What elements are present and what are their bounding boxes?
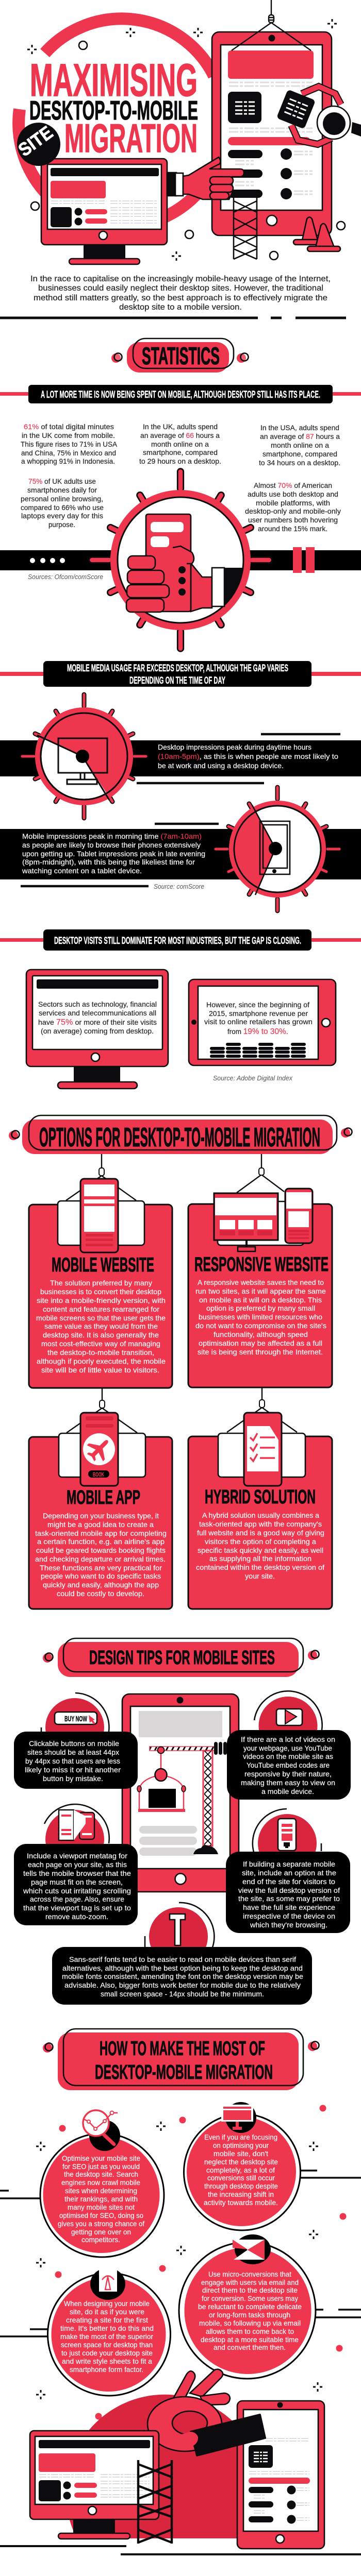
circle tip: SEO: sites when determining bbox=[65, 2187, 137, 2195]
panel: hybrid solution: your site. bbox=[245, 1572, 275, 1580]
stat: UK adults hours: In the UK, adults spend bbox=[143, 422, 218, 431]
panel: mobile app: task-oriented mobile app for completing bbox=[35, 1529, 167, 1537]
monitor with sectors stat: services and telecommunications all bbox=[39, 1009, 156, 1017]
stat: UK adults hours: month online on a bbox=[151, 440, 209, 448]
stat: American adults bbox=[245, 481, 341, 533]
panel: responsive website: functionality, although speed bbox=[214, 1330, 308, 1338]
circle tip: SEO: the desktop site. Search bbox=[64, 2170, 138, 2178]
band: mobile impressions: Mobile impressions peak in morning time (7am-10am) bbox=[22, 832, 202, 840]
tip: separate mobile site: If building a separate mobile bbox=[243, 1860, 335, 1868]
closing illustration bbox=[30, 2369, 324, 2549]
band: desktop impressions: (10am-5pm) , as this is when people are most likely to bbox=[158, 752, 338, 760]
panel: mobile app: people who want to do specific tasks bbox=[41, 1572, 161, 1580]
circle tip: desktop site: activity towards mobile. bbox=[204, 2198, 278, 2207]
ground lines bbox=[0, 2546, 361, 2554]
intro text bbox=[30, 275, 331, 312]
icon: typography T bbox=[145, 1903, 214, 1966]
stat: UK digital minutes: in the UK come from mobile. bbox=[22, 431, 115, 439]
icon: phone with desktop link bbox=[253, 1809, 321, 1873]
panel: hybrid solution: A hybrid solution usually combines a bbox=[202, 1511, 319, 1519]
circle tip: micro-conversions: or long-form tasks through bbox=[209, 2311, 290, 2319]
stat: UK adults smartphones bbox=[21, 477, 104, 529]
tip: viewport metatag: that the viewport tag is set up to bbox=[23, 1904, 131, 1912]
stat: UK adults smartphones: personal online browsing, bbox=[21, 495, 103, 503]
stat: American adults: mobile platforms, with bbox=[256, 499, 330, 507]
panel: responsive website: run two sites, as it will appear the same bbox=[195, 1287, 326, 1295]
stat: UK digital minutes bbox=[21, 422, 118, 465]
tip: separate mobile site: irrespective of the device on bbox=[243, 1912, 335, 1920]
stat: American adults: Almost 70% of American bbox=[254, 481, 332, 489]
panel: hybrid solution: task-oriented app with the company's bbox=[199, 1520, 322, 1528]
tip: viewport metatag: which cuts out irritating scrolling bbox=[23, 1887, 131, 1895]
circle tip: desktop site: Even if you are focusing bbox=[204, 2133, 277, 2141]
circle tip: SEO: for SEO just as you would bbox=[62, 2162, 140, 2171]
band: mobile impressions bbox=[0, 824, 361, 886]
panel: responsive website: do not want to compromise on the site's bbox=[195, 1321, 326, 1330]
panel: mobile website: The solution preferred by many bbox=[50, 1279, 152, 1287]
circle tip: desktop site: the increasing shift in bbox=[208, 2190, 274, 2198]
band: mobile impressions: watching content on a tablet device. bbox=[22, 867, 142, 875]
band: mobile impressions: (8pm-midnight), with this being the likeliest time for bbox=[22, 858, 195, 866]
tablet bbox=[237, 2401, 324, 2549]
monitor with sectors stat: Sectors such as technology, financial bbox=[38, 1000, 157, 1008]
panel: mobile website: the desktop-to-mobile transition, bbox=[47, 1348, 154, 1357]
large phone bbox=[212, 0, 332, 235]
panel: mobile website: MOBILE WEBSITE bbox=[52, 1254, 154, 1276]
circle tip: SEO: optimised for SEO, doing so bbox=[59, 2211, 143, 2219]
tip: youtube videos: making them easy to view on bbox=[241, 1778, 335, 1787]
heading: how to make the most bbox=[43, 2029, 319, 2090]
black card held in hand bbox=[191, 2415, 265, 2455]
panel: hybrid solution: as supplying all the information bbox=[209, 1554, 311, 1563]
traffic cones bbox=[293, 217, 340, 251]
panel: responsive website: site is being sent through the Internet. bbox=[198, 1348, 323, 1356]
tip: viewport metatag: Include a viewport metatag for bbox=[27, 1852, 127, 1860]
pointing hand bbox=[167, 157, 244, 199]
circle tip: micro-conversions: engage with users via email and bbox=[201, 2278, 299, 2286]
stat: USA adults hours: month online on a bbox=[271, 441, 329, 449]
tip: viewport metatag bbox=[14, 1844, 138, 1925]
phone with crane illustration bbox=[122, 1694, 239, 1892]
tablet with revenue stat bbox=[189, 979, 336, 1065]
panel: hybrid solution: contained within the desktop version of bbox=[196, 1563, 324, 1571]
icon: buy now button bbox=[41, 1693, 109, 1757]
band: mobile impressions: as people are likely to browse their phones extensively bbox=[22, 841, 201, 849]
stat: UK adults smartphones: smartphones daily for bbox=[27, 486, 97, 494]
crane hook rope bbox=[232, 0, 311, 50]
circle tip: desktop site: through desktop despite bbox=[204, 2182, 278, 2190]
band: desktop impressions: Desktop impressions peak during daytime hours bbox=[158, 743, 311, 751]
sources note: Sources: Ofcom/comScore bbox=[28, 573, 103, 581]
circle tip: SEO: Optimise your mobile site bbox=[62, 2154, 140, 2162]
stat: UK digital minutes: This figure rises to 71% in USA bbox=[21, 440, 118, 448]
tip: clickable buttons: Clickable buttons on mobile bbox=[29, 1739, 119, 1748]
tip: viewport metatag: each page on your site, as this bbox=[28, 1860, 127, 1869]
tip: viewport metatag: across the page. Also, ensure bbox=[30, 1895, 124, 1903]
heading: options bbox=[9, 1115, 352, 1154]
panel: hybrid solution: specific task quickly and easily, as well bbox=[198, 1546, 323, 1554]
stat: UK adults hours: to 29 hours on a desktop. bbox=[139, 457, 221, 465]
black band with loading dots bbox=[0, 547, 361, 573]
panel: responsive website: option is preferred by many small bbox=[206, 1304, 315, 1312]
stat: USA adults hours bbox=[259, 423, 340, 467]
circle tip: micro-conversions: allows them to come back to bbox=[206, 2327, 294, 2335]
circle tip: SEO: many mobile sites not bbox=[68, 2203, 135, 2211]
panel: mobile website bbox=[29, 1154, 172, 1388]
subheading: media usage: DEPENDING ON THE TIME OF DAY bbox=[129, 675, 225, 686]
subheading: desktop visits bbox=[0, 929, 361, 951]
panel: responsive website: optimisation may be affected as a full bbox=[199, 1339, 322, 1347]
site badge: SITE bbox=[14, 122, 57, 160]
circle tip: designing mobile site: and write style sheets to fit a bbox=[62, 2357, 152, 2365]
panel: mobile app: might be a good idea to create a bbox=[47, 1520, 154, 1529]
tablet with revenue stat: visit to online retailers has grown bbox=[204, 1018, 313, 1026]
source note: Source: comScore bbox=[154, 883, 204, 890]
backdrop shape bbox=[66, 2395, 264, 2538]
stat: UK adults smartphones: compared to 66% who use bbox=[21, 503, 104, 512]
circle tip: SEO: engines now crawl mobile bbox=[61, 2178, 140, 2187]
circle tip: desktop site: conversions still occur bbox=[207, 2174, 275, 2182]
title: MIGRATION bbox=[64, 115, 198, 161]
title: MAXIMISING bbox=[30, 54, 198, 106]
circle tip: designing mobile site: site, do it as if you were bbox=[70, 2308, 144, 2316]
circle tip: micro-conversions bbox=[179, 2234, 316, 2379]
panel: mobile website: site into a mobile-friendly version, with bbox=[37, 1296, 166, 1304]
tip: separate mobile site: the site, as some may prefer to bbox=[238, 1894, 340, 1903]
panel: mobile app: could be geared towards booking flights bbox=[36, 1546, 166, 1554]
scaffold tower bbox=[138, 2460, 172, 2544]
circle tip: desktop site: completely, as a lot of bbox=[206, 2166, 275, 2174]
stat: UK adults hours: smartphone, compared bbox=[143, 448, 218, 456]
tip: separate mobile site: view the full desktop version of bbox=[238, 1886, 340, 1894]
tip: viewport metatag: tells the mobile browser that the bbox=[23, 1869, 131, 1877]
panel: mobile website: content and features rearranged for bbox=[43, 1305, 159, 1313]
tip: viewport metatag: page must fit on the screen, bbox=[31, 1878, 123, 1886]
panel: mobile app: Depending on your business type, it bbox=[43, 1512, 159, 1520]
target wheel with hand holding phone bbox=[92, 471, 269, 649]
circle tip: designing mobile site: time. It's better to do this and bbox=[60, 2324, 154, 2332]
circle tip: desktop site: mobile site, don't bbox=[214, 2149, 268, 2158]
circle tip: designing mobile site: When designing your mobile bbox=[64, 2299, 150, 2308]
stat: UK adults smartphones: purpose. bbox=[48, 520, 75, 529]
stat: UK digital minutes: and China, 75% in Mexico and bbox=[21, 449, 116, 457]
icon: video play bbox=[254, 1691, 322, 1755]
panel: mobile app: a certain function, e.g. an airline's app bbox=[37, 1537, 165, 1546]
tip: viewport metatag: remove auto-zoom. bbox=[45, 1912, 108, 1921]
stat: UK adults smartphones: laptops every day for this bbox=[21, 512, 103, 520]
tip: separate mobile site: have the full site experience bbox=[243, 1903, 335, 1911]
stat: American adults: around the 15% mark. bbox=[258, 524, 327, 533]
band: mobile impressions: upon getting up. Tablet impressions peak in late evening bbox=[22, 850, 205, 858]
tip: separate mobile site: end of the site for visitors to bbox=[242, 1877, 335, 1886]
tablet with revenue stat: However, since the beginning of bbox=[206, 1001, 309, 1009]
tip: separate mobile site: site, include an option at the bbox=[242, 1869, 336, 1877]
connector lines bbox=[0, 2171, 361, 2336]
monitor with sectors stat bbox=[26, 970, 168, 1089]
tip: separate mobile site bbox=[226, 1852, 350, 1933]
divider bbox=[0, 316, 346, 319]
circle tip: designing mobile site: screen space for desktop than bbox=[61, 2341, 153, 2349]
icon: desktop monitor bbox=[221, 2102, 256, 2133]
circle tip: micro-conversions: desktop at a more suitable time bbox=[201, 2335, 299, 2344]
stat: UK digital minutes: 61% of total digital minutes bbox=[24, 422, 114, 431]
panel: mobile website: most cost-effective way of managing bbox=[41, 1340, 160, 1348]
circle tip: designing mobile site: creating a site for the first bbox=[66, 2316, 148, 2324]
icon: mobile layout bbox=[58, 1179, 144, 1252]
tip: clickable buttons: button by mistake. bbox=[43, 1774, 103, 1783]
intro text: desktop site to a mobile version. bbox=[119, 303, 242, 312]
panel: mobile website: site will be of little value to visitors. bbox=[41, 1366, 159, 1374]
icon: booking app: BOOK bbox=[93, 1471, 104, 1478]
circle tip: desktop site bbox=[184, 2102, 300, 2230]
band: desktop impressions bbox=[0, 734, 361, 783]
stat: UK adults hours bbox=[139, 422, 221, 465]
circle tip: designing mobile site: make the most of the superior bbox=[60, 2332, 153, 2341]
heading: statistics bbox=[111, 338, 249, 372]
source note: Source: Adobe Digital Index bbox=[213, 1074, 292, 1082]
tip: youtube videos: YouTube embed codes are bbox=[247, 1761, 330, 1769]
desktop clock wheel bbox=[22, 694, 146, 818]
panel: responsive website: on mobile as it will on a desktop. This bbox=[199, 1296, 322, 1304]
scaffold tower bbox=[234, 198, 257, 259]
stat: USA adults hours: to 34 hours on a desktop. bbox=[259, 459, 340, 467]
subheading: media usage bbox=[0, 661, 361, 687]
tip: youtube videos: videos on the mobile site as bbox=[243, 1752, 333, 1760]
panel: mobile website: businesses is to convert their desktop bbox=[40, 1287, 161, 1296]
panel: hybrid solution: full website and is a good way of giving bbox=[197, 1529, 324, 1537]
tip: sans-serif fonts: mobile fonts consistent, amending the font on the desktop version may be bbox=[62, 1972, 303, 1980]
heading: statistics: STATISTICS bbox=[142, 342, 220, 369]
panel: hybrid solution: visitors the option of completing a bbox=[205, 1537, 316, 1546]
desktop monitor bbox=[41, 159, 167, 264]
title bbox=[29, 54, 198, 161]
circle tip: designing mobile site: smartphone form factor. bbox=[70, 2365, 143, 2374]
stat: USA adults hours: In the USA, adults spend bbox=[260, 423, 339, 432]
icon: booking app bbox=[59, 1413, 145, 1486]
stat: UK adults hours: an average of 66 hours a bbox=[140, 431, 220, 439]
stat: American adults: user numbers both hovering bbox=[248, 516, 338, 524]
stat: USA adults hours: smartphone, compared bbox=[262, 450, 337, 458]
panel: mobile website: same value as they would from the bbox=[44, 1322, 158, 1330]
circle tip: designing mobile site bbox=[47, 2264, 170, 2396]
panel: mobile app: These functions are very practical for bbox=[40, 1564, 162, 1572]
icon: buy now button: BUY NOW bbox=[64, 1715, 88, 1723]
tip: sans-serif fonts: alternatives, although with the best option being to keep the desktop and bbox=[62, 1964, 303, 1972]
tip: clickable buttons: by 44px so that users are less bbox=[25, 1757, 120, 1765]
hero illustration bbox=[19, 0, 361, 264]
tip: youtube videos: responsive by their nature, bbox=[244, 1770, 332, 1778]
icon: responsive devices bbox=[214, 1189, 313, 1251]
circle tip: SEO: getting one over on bbox=[71, 2228, 131, 2236]
tip: clickable buttons: likely to miss it or hit another bbox=[25, 1766, 121, 1774]
band: desktop impressions: be at work and using a desktop device. bbox=[158, 761, 284, 770]
stat: American adults: adults use both desktop and bbox=[248, 490, 338, 498]
stat: American adults: desktop-only and mobile-only bbox=[245, 507, 341, 515]
decorative red circle arcs bbox=[19, 19, 214, 226]
tablet with revenue stat: 2015, smartphone revenue per bbox=[209, 1009, 308, 1018]
panel: mobile website: desktop site. It is also generally the bbox=[43, 1331, 159, 1339]
intro text: businesses could easily neglect their desktop sites. However, the traditional bbox=[38, 284, 323, 293]
panel: mobile app: could be costly to develop. bbox=[57, 1589, 144, 1598]
panel: hybrid solution bbox=[188, 1387, 332, 1609]
tip: youtube videos: a mobile device. bbox=[261, 1787, 314, 1795]
tip: clickable buttons: sites should be at least 44px bbox=[27, 1748, 119, 1756]
circle tip: desktop site: neglect the desktop site bbox=[204, 2158, 278, 2166]
tip: clickable buttons bbox=[14, 1732, 138, 1789]
intro text: In the race to capitalise on the increasingly mobile-heavy usage of the Internet, bbox=[30, 275, 331, 283]
icon: magnifier graph bbox=[83, 2110, 120, 2151]
panel: responsive website bbox=[188, 1154, 332, 1387]
panel: mobile website: mobile screens so that the user gets the bbox=[36, 1314, 166, 1322]
circle tip: micro-conversions: be reluctant to complete delicate bbox=[198, 2302, 302, 2311]
tip: sans-serif fonts: small screen space - 14px should be the minimum. bbox=[101, 1990, 264, 1998]
panel: mobile website: although if poorly executed, the mobile bbox=[37, 1357, 166, 1365]
crane bbox=[137, 1742, 227, 1854]
tip: youtube videos: If there are a lot of videos on bbox=[241, 1735, 335, 1743]
circle tip: micro-conversions: direct them to the desktop site bbox=[202, 2286, 298, 2294]
stat: UK digital minutes: a whopping 91% in Indonesia. bbox=[21, 457, 115, 465]
circle tip: micro-conversions: and convert them then. bbox=[214, 2343, 286, 2351]
bar columns bbox=[210, 1043, 306, 1058]
title: DESKTOP-TO-MOBILE bbox=[29, 96, 198, 126]
stat: UK adults smartphones: 75% of UK adults use bbox=[28, 477, 96, 485]
scattered dots and sparkles bbox=[36, 2105, 347, 2419]
tip: youtube videos: your webpage, use YouTube bbox=[243, 1744, 332, 1752]
panel: mobile app bbox=[29, 1388, 172, 1609]
icon: checklist bbox=[218, 1413, 305, 1486]
monitor with sectors stat: have 75% or more of their site visits bbox=[38, 1018, 157, 1027]
icon: vector document bbox=[90, 2264, 125, 2300]
icon: envelope bbox=[233, 2234, 271, 2264]
mobile clock wheel bbox=[216, 787, 339, 911]
circle tip: desktop site: on optimising your bbox=[213, 2141, 269, 2149]
circle tip: SEO: gives you a strong chance of bbox=[58, 2219, 144, 2228]
OK hand bbox=[147, 2369, 230, 2451]
circle tip: micro-conversions: mobile, so following up via email bbox=[199, 2319, 301, 2327]
tip: sans-serif fonts: advisable. Also, bigger fonts work better for mobile due to the relatively bbox=[64, 1981, 301, 1989]
sparkles and rings bbox=[27, 19, 345, 261]
tip: sans-serif fonts bbox=[52, 1947, 312, 2005]
circle tip: micro-conversions: Use micro-conversions that bbox=[208, 2270, 291, 2278]
tip: separate mobile site: which they're browsing. bbox=[250, 1921, 327, 1929]
circle tip: SEO bbox=[40, 2110, 164, 2257]
stat: USA adults hours: an average of 87 hours a bbox=[260, 432, 340, 440]
claw holding black card bbox=[276, 87, 361, 144]
icon: viewport devices bbox=[44, 1804, 109, 1869]
panel: mobile app: quickly and easily, although the app bbox=[43, 1581, 159, 1589]
intro text: method still matters greatly, so the best approach is to effectively migrate the bbox=[34, 294, 327, 302]
monitor bbox=[30, 2431, 159, 2539]
panel: responsive website: A responsive website saves the need to bbox=[198, 1278, 324, 1286]
panel: responsive website: businesses with limited resources who bbox=[199, 1313, 322, 1321]
circle tip: SEO: their rankings, and with bbox=[64, 2195, 138, 2203]
circle tip: SEO: competitors. bbox=[81, 2235, 120, 2244]
panel: mobile app: and checking departure or arrival times. bbox=[35, 1555, 166, 1563]
tip: sans-serif fonts: Sans-serif fonts tend to be easier to read on mobile devices than serif bbox=[69, 1955, 296, 1963]
heading: design tips bbox=[43, 1638, 319, 1677]
subheading: time on mobile bbox=[0, 385, 361, 403]
tablet with revenue stat: from 19% to 30%. bbox=[227, 1027, 288, 1036]
panel: mobile app: MOBILE APP bbox=[67, 1487, 140, 1509]
tip: youtube videos bbox=[227, 1730, 351, 1800]
circle tip: designing mobile site: to just code your desktop site bbox=[61, 2349, 153, 2357]
monitor with sectors stat: (on average) coming from desktop. bbox=[41, 1027, 154, 1035]
circle tip: micro-conversions: for conversion. Some users may bbox=[202, 2294, 298, 2302]
thumb bbox=[166, 2432, 198, 2448]
